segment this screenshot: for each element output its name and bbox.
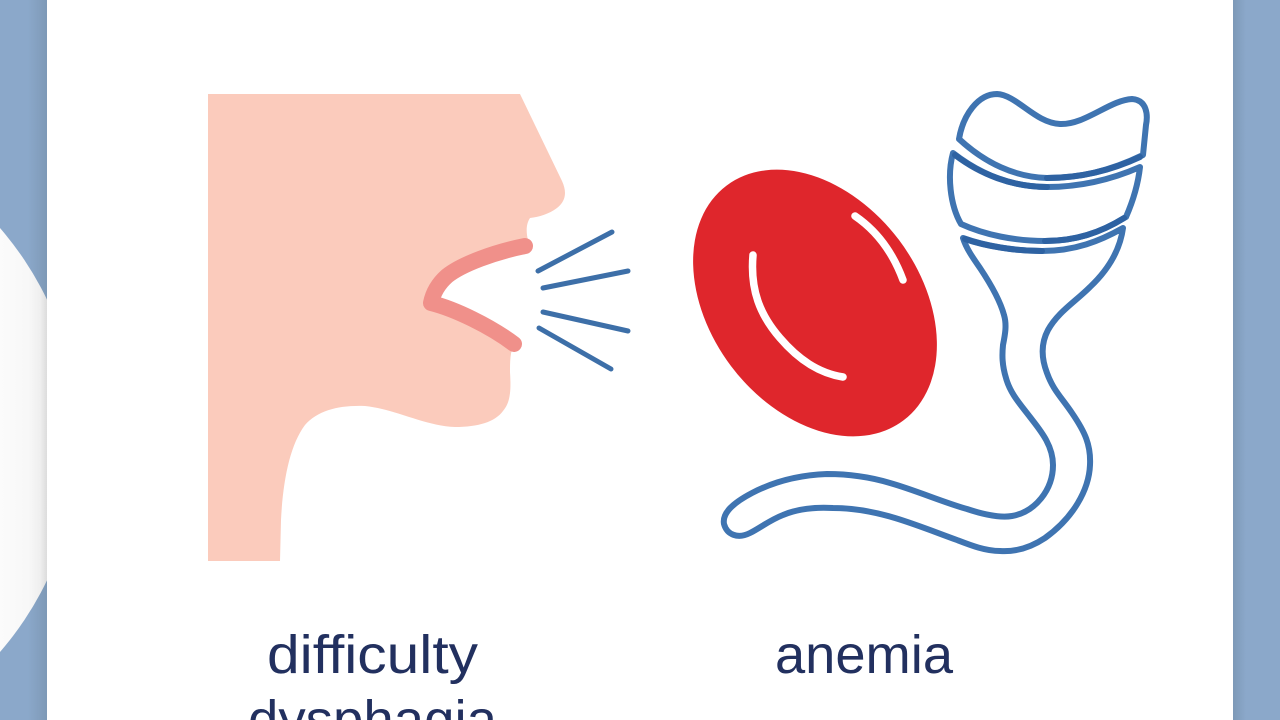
breath lines bbox=[538, 232, 628, 369]
icon: face profile with open mouth bbox=[208, 94, 628, 561]
darker ring seams bbox=[955, 155, 1140, 251]
middle throat segment bbox=[950, 153, 1140, 241]
face silhouette bbox=[208, 94, 565, 561]
icon: red blood cell bbox=[643, 122, 987, 484]
upper throat segment bbox=[959, 94, 1147, 178]
esophagus tube bbox=[724, 228, 1123, 551]
label: difficulty dysphagia: difficulty bbox=[267, 625, 478, 685]
icon: throat and esophagus outline bbox=[724, 94, 1147, 551]
lips bbox=[431, 246, 525, 344]
label: anemia: anemia bbox=[775, 625, 954, 685]
left partial circle bbox=[0, 228, 47, 652]
label: difficulty dysphagia bbox=[248, 625, 498, 720]
